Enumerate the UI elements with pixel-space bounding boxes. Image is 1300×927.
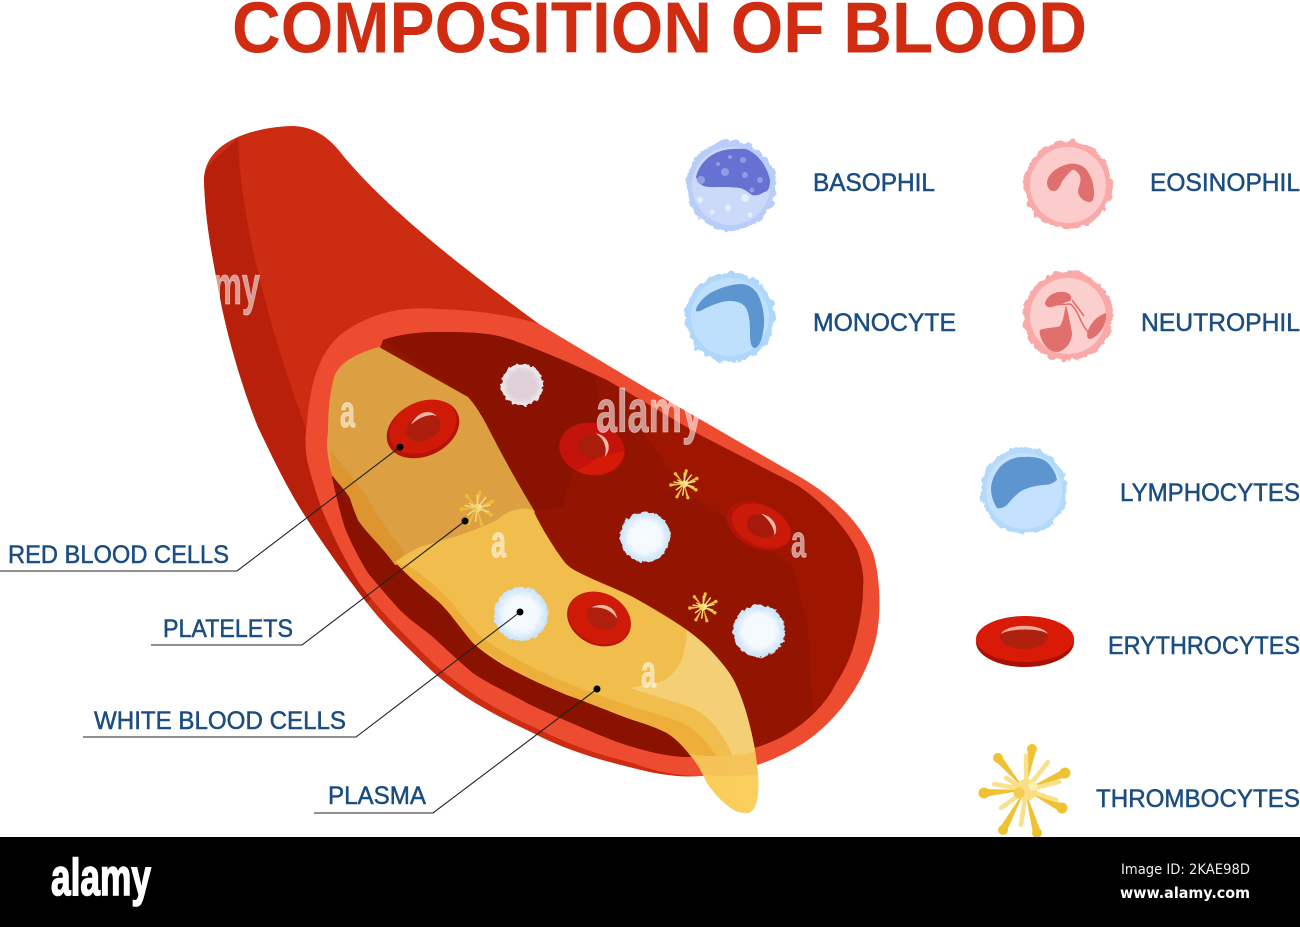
icon: basophil [686,141,776,231]
watermark letters on artwork: my [213,256,260,316]
white blood cell lilac [501,364,543,406]
platelet in plasma [459,491,494,526]
red blood cell upper [554,417,630,481]
icon: lymphocyte [981,448,1067,534]
plasma lower band [395,562,745,820]
watermark letters on artwork: a [641,646,657,697]
red blood cell in light plasma [558,581,640,657]
vessel wall shadow [204,137,380,603]
vessel wall ring [306,308,879,776]
red blood cell in plasma [377,388,469,470]
callout: white blood cells: WHITE BLOOD CELLS [94,707,346,735]
callout: red blood cells: RED BLOOD CELLS [8,541,229,569]
lumen dark upper area [383,332,600,510]
watermark letters on artwork: alamy [596,378,703,445]
red blood cell right [719,492,799,560]
watermark letters on artwork: a [340,386,356,437]
watermark letters on artwork [213,256,807,697]
footer bar [0,837,1300,927]
watermark letters on artwork: a [791,516,807,567]
platelet upper [669,469,699,499]
vessel lumen [332,332,863,757]
label: basophil: BASOPHIL [813,169,935,197]
plasma overlays clipped to shape [395,562,770,825]
footer image id: Image ID: 2KAE98D [1121,862,1250,878]
white blood cell in plasma [494,587,548,641]
plasma light section [395,508,758,813]
icon: monocyte [685,272,775,362]
callout: platelets: PLATELETS [163,615,293,643]
white blood cell lower right [733,605,785,657]
callout: plasma [314,686,600,813]
vessel outer wall [204,126,879,777]
callout: platelets [151,518,468,645]
label: eosinophil: EOSINOPHIL [1150,169,1300,197]
callout: red blood cells [0,444,404,571]
icon: thrombocyte [978,744,1070,838]
plasma dark section [327,347,535,565]
icon: eosinophil [1024,141,1112,229]
blood vessel cross-section [204,126,879,825]
plasma over vessel ring [689,752,758,776]
icon: erythrocyte [976,616,1074,667]
plasma tip highlight [630,630,756,756]
icon: neutrophil [1023,271,1113,361]
watermark letters on artwork: a [491,516,507,567]
footer url: www.alamy.com [1120,884,1250,902]
plasma drop tip [703,774,758,813]
lumen lighter right area [628,393,863,714]
label: monocyte: MONOCYTE [813,309,956,337]
plasma dark lower strip [330,450,405,565]
lumen dark lower crescent [332,477,710,757]
callout: plasma: PLASMA [328,782,426,810]
white blood cell center [620,512,670,562]
platelet lower [688,592,718,622]
callout: white blood cells [83,608,524,737]
label: neutrophil: NEUTROPHIL [1141,309,1300,337]
footer logo: alamy [51,849,151,907]
